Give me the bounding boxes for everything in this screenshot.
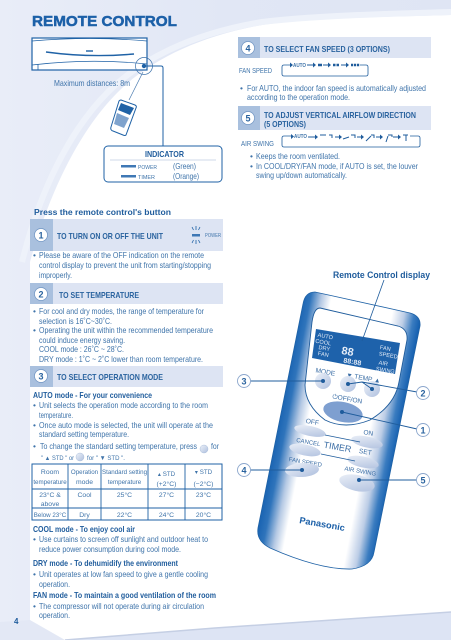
title: REMOTE CONTROL <box>32 13 177 30</box>
table: standard setting temperatures: above <box>41 501 59 508</box>
panel: step 2 header: 2 <box>38 290 44 300</box>
text block: step 2: • <box>33 306 36 316</box>
air swing diagram: AUTO <box>294 134 307 140</box>
remote LCD display <box>312 329 400 376</box>
panel: step 5 header: TO ADJUST VERTICAL AIRFLOW DIRECTION <box>264 111 416 120</box>
remote labels <box>288 367 381 478</box>
text block: auto mode: To change the standard setting temperature, press <box>40 441 197 451</box>
text block: fan mode: FAN mode - To maintain a good ventilation of the room <box>33 590 216 600</box>
panel: indicator <box>104 146 222 182</box>
text block: auto mode: Unit selects the operation mode according to the room <box>39 400 208 410</box>
text block: step 2 <box>33 306 213 364</box>
text block: step 2: Operating the unit within the recommended temperature <box>39 325 213 335</box>
Panasonic logo: Panasonic <box>299 515 346 533</box>
panel: indicator: INDICATOR <box>145 149 184 159</box>
callout 1: 1 <box>420 426 426 436</box>
remote LCD display: AIR <box>378 360 388 368</box>
panel: step 1 header: POWER <box>205 233 221 239</box>
text block: auto mode: temperature. <box>39 410 73 420</box>
text block: auto mode: " ▲ STD " or <box>41 456 74 462</box>
text block: step 2: could induce energy saving. <box>39 335 125 345</box>
text block: fan mode: operation. <box>39 610 70 620</box>
remote LCD display: 88:88 <box>343 358 362 368</box>
text block: dry mode: operation. <box>39 579 70 589</box>
text block: auto mode: for <box>211 441 219 451</box>
table: standard setting temperatures: (−2°C) <box>194 480 213 488</box>
text block: step 2: DRY mode : 1˚C ~ 2˚C lower than room temperature. <box>39 354 203 364</box>
table: standard setting temperatures: temperature <box>108 479 142 486</box>
callout 4 <box>238 464 304 476</box>
text block: dry mode <box>33 558 208 589</box>
remote labels: ON <box>363 429 374 438</box>
heading: press the button: Press the remote control's button <box>34 207 171 217</box>
table: standard setting temperatures: Dry <box>79 512 90 519</box>
text block: auto mode <box>33 390 219 462</box>
panel: indicator: (Orange) <box>173 171 199 181</box>
table: standard setting temperatures: Room <box>41 469 59 476</box>
table: standard setting temperatures <box>32 464 222 520</box>
table: standard setting temperatures: 25°C <box>117 491 132 499</box>
table: standard setting temperatures: Below 23°C <box>34 512 67 519</box>
heading: remote control display: Remote Control display <box>333 270 430 280</box>
text block: air swing notes <box>250 151 418 180</box>
panel: step 3 header: 3 <box>38 372 44 382</box>
text block: step 1 <box>33 250 211 280</box>
text block: air swing notes: • <box>250 151 253 161</box>
panel: step 2 header <box>30 283 223 304</box>
text block: step 2: selection is 16˚C~30˚C. <box>39 316 112 326</box>
text block: cool mode: • <box>33 534 36 544</box>
table: standard setting temperatures: (+2°C) <box>157 480 176 488</box>
text block: step 1: improperly. <box>39 270 72 280</box>
page number: 4 <box>14 617 19 626</box>
remote LCD display: FAN <box>317 351 329 359</box>
text block: air swing notes: Keeps the room ventilated. <box>256 151 340 161</box>
table: standard setting temperatures: 23°C & <box>39 491 61 499</box>
remote LCD display: DRY <box>318 345 331 353</box>
table: standard setting temperatures: ▴ STD <box>158 471 176 478</box>
panel: indicator: TIMER <box>138 175 155 181</box>
callout 2: 2 <box>420 388 426 398</box>
table: standard setting temperatures: 20°C <box>196 511 211 519</box>
remote labels: CANCEL <box>296 438 321 448</box>
callout 5: 5 <box>420 476 426 486</box>
remote LCD display: COOL <box>315 339 332 347</box>
panel: indicator: (Green) <box>173 161 196 171</box>
fan speed diagram: AUTO <box>293 63 306 69</box>
callout 3 <box>238 374 325 388</box>
indicator connector line <box>144 66 163 146</box>
panel: step 4 header: 4 <box>245 44 251 54</box>
text block: auto mode: AUTO mode - For your convenience <box>33 390 152 400</box>
text block: fan speed note <box>240 83 426 102</box>
table: standard setting temperatures: Operation <box>71 469 99 476</box>
text block: cool mode: reduce power consumption during cool mode. <box>39 544 181 554</box>
remote labels: OFF <box>305 418 319 427</box>
panel: step 2 header: TO SET TEMPERATURE <box>59 291 139 300</box>
remote labels: SET <box>358 448 372 457</box>
table: standard setting temperatures: 23°C <box>196 491 211 499</box>
remote labels: AIR SWING <box>344 466 377 478</box>
panel: step 3 header <box>30 366 223 387</box>
text block: cool mode: Use curtains to screen off sunlight and outdoor heat to <box>39 534 208 544</box>
text block: dry mode: Unit operates at low fan speed to give a gentle cooling <box>39 569 208 579</box>
text block: air swing notes: In COOL/DRY/FAN mode, if AUTO is set, the louver <box>256 161 418 171</box>
fan speed diagram: FAN SPEED <box>239 66 272 75</box>
text block: air swing notes: • <box>250 161 253 171</box>
table: standard setting temperatures: Cool <box>78 492 92 499</box>
panel: step 5 header: 5 <box>245 114 251 124</box>
table: standard setting temperatures: 22°C <box>117 511 132 519</box>
text block: step 1: control display to prevent the unit from starting/stopping <box>39 260 211 270</box>
table: standard setting temperatures: ▾ STD <box>195 469 213 476</box>
table: standard setting temperatures: Standard setting <box>102 469 148 476</box>
remote LCD display: AUTO <box>317 333 334 341</box>
text block: step 1: • <box>33 250 36 260</box>
remote labels: MODE <box>315 367 336 378</box>
text block: auto mode: for " ▼ STD ". <box>87 455 125 462</box>
callout 2 <box>346 382 430 400</box>
text block: fan mode: The compressor will not operate during air circulation <box>39 601 204 611</box>
panel: step 5 header <box>238 106 431 130</box>
text block: auto mode: standard setting temperature. <box>39 429 129 439</box>
panel: step 1 header: 1 <box>38 230 44 240</box>
table: standard setting temperatures: 24°C <box>159 511 174 519</box>
text block: fan mode: • <box>33 601 36 611</box>
distance label: Maximum distances: 8m <box>54 78 130 88</box>
remote labels: ⏻OFF/ON <box>332 392 363 406</box>
icon: small remote with signal line <box>111 72 143 136</box>
text block: dry mode: DRY mode - To dehumidify the environment <box>33 558 178 568</box>
panel: step 5 header: (5 OPTIONS) <box>264 120 306 129</box>
text block: fan speed note: according to the operation mode. <box>247 92 350 102</box>
text block: auto mode: • <box>33 400 36 410</box>
text block: step 2: COOL mode : 26˚C ~ 28˚C. <box>39 344 124 354</box>
illustration: remote control <box>258 292 420 569</box>
remote LCD display: 88 <box>340 345 355 359</box>
remote LCD display: FAN <box>379 345 391 353</box>
text block: auto mode: Once auto mode is selected, the unit will operate at the <box>39 420 213 430</box>
callout 4: 4 <box>241 466 247 476</box>
table: standard setting temperatures: 27°C <box>159 491 174 499</box>
callout: display leader <box>362 280 384 341</box>
text block: step 2: For cool and dry modes, the range of temperature for <box>39 306 204 316</box>
text block: fan mode <box>33 590 216 620</box>
air swing diagram: AIR SWING <box>241 139 274 148</box>
callout 3: 3 <box>241 376 247 386</box>
callout 5 <box>357 474 430 486</box>
remote buttons <box>285 373 384 495</box>
text block: fan speed note: • <box>240 83 243 93</box>
text block: cool mode <box>33 524 208 554</box>
panel: step 4 header: TO SELECT FAN SPEED (3 OPTIONS) <box>264 45 390 54</box>
text block: auto mode: • <box>33 420 36 430</box>
remote LCD display: SWING <box>375 366 395 376</box>
panel: step 3 header: TO SELECT OPERATION MODE <box>57 373 163 382</box>
callout 1 <box>340 410 430 436</box>
remote labels: FAN SPEED <box>288 457 323 469</box>
text block: air swing notes: swing up/down automatically. <box>256 170 347 180</box>
icon: indoor air conditioner unit <box>32 38 152 74</box>
text block: cool mode: COOL mode - To enjoy cool air <box>33 524 136 534</box>
text block: auto mode: • <box>33 441 36 451</box>
panel: step 4 header <box>238 37 431 58</box>
text block: step 2: • <box>33 325 36 335</box>
remote labels: ▼ TEMP ▲ <box>346 372 381 385</box>
panel: step 1 header: TO TURN ON OR OFF THE UNIT <box>57 232 163 241</box>
table: standard setting temperatures: mode <box>76 479 93 486</box>
table: standard setting temperatures: temperature <box>33 479 67 486</box>
text block: dry mode: • <box>33 569 36 579</box>
air swing diagram <box>241 134 420 148</box>
fan speed diagram <box>239 62 368 76</box>
text block: step 1: Please be aware of the OFF indication on the remote <box>39 250 204 260</box>
remote labels: TIMER <box>323 440 353 454</box>
panel: indicator: POWER <box>138 165 157 171</box>
remote LCD display: SPEED <box>378 351 398 361</box>
panel: step 1 header <box>30 219 223 251</box>
